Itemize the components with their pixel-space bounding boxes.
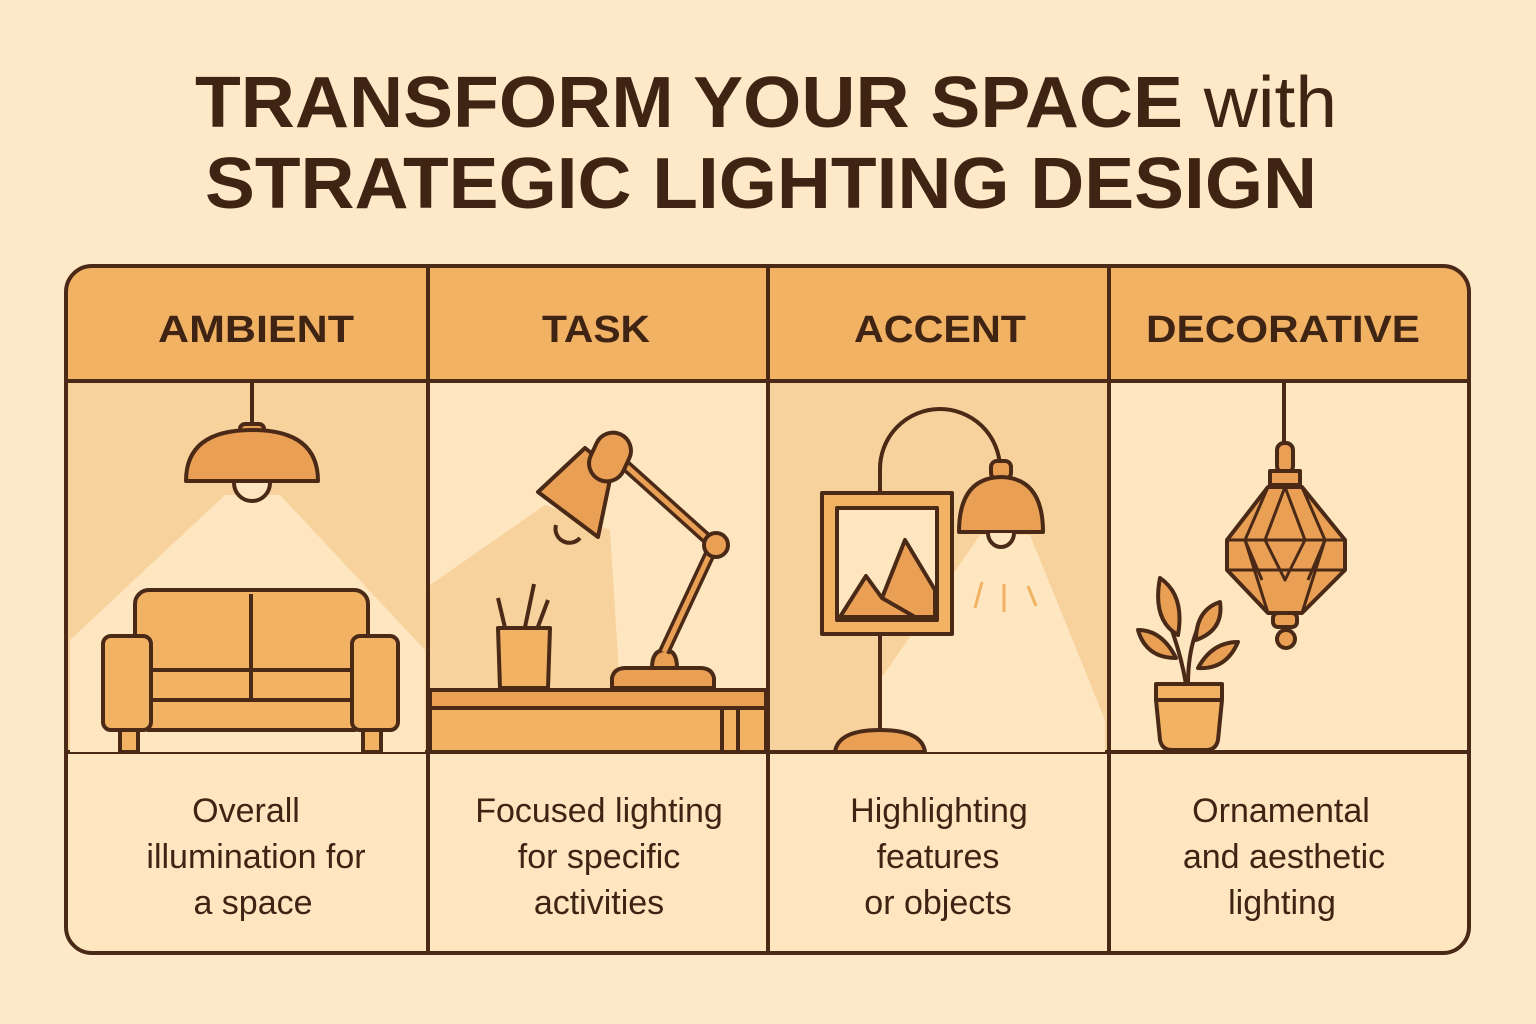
title [195, 63, 1337, 224]
icon: task desk lamp [430, 427, 766, 752]
descriptions: Ornamental [1192, 792, 1370, 830]
descriptions: Highlighting [850, 792, 1028, 830]
descriptions [146, 792, 1385, 922]
headers: TASK [542, 309, 651, 351]
headers [158, 309, 1420, 351]
descriptions: features [877, 838, 999, 876]
headers: DECORATIVE [1146, 309, 1420, 351]
table panel [66, 266, 1469, 953]
descriptions: a space [193, 884, 313, 922]
headers: ACCENT [854, 309, 1026, 351]
title: TRANSFORM YOUR SPACE with [195, 63, 1337, 143]
descriptions: or objects [864, 884, 1012, 922]
descriptions: and aesthetic [1183, 838, 1385, 876]
headers: AMBIENT [158, 309, 354, 351]
descriptions: illumination for [146, 838, 366, 876]
descriptions: Overall [192, 792, 300, 830]
icon: ambient pendant and sofa [70, 383, 425, 752]
icon: decorative lantern and plant [1138, 383, 1345, 750]
descriptions: lighting [1228, 884, 1336, 922]
title: STRATEGIC LIGHTING DESIGN [205, 144, 1317, 224]
icon: accent lamp and artwork [822, 409, 1105, 752]
descriptions: activities [534, 884, 664, 922]
descriptions: Focused lighting [475, 792, 723, 830]
descriptions: for specific [518, 838, 680, 876]
